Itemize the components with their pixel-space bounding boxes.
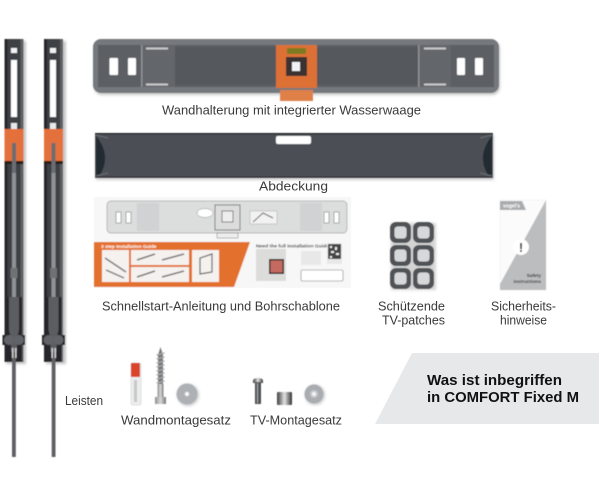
cover bbox=[95, 133, 494, 180]
wall mounting kit bbox=[131, 347, 199, 406]
safety instructions booklet: Safety bbox=[527, 273, 541, 279]
label: Leisten: Leisten bbox=[65, 394, 103, 408]
wall bracket bbox=[93, 39, 500, 101]
caption: protective patches: TV-patches bbox=[382, 312, 445, 328]
orange installation guide bbox=[94, 242, 250, 287]
screw bbox=[155, 347, 166, 404]
safety instructions booklet: instructions bbox=[514, 279, 541, 285]
caption: safety notes: Sicherheits- bbox=[491, 298, 556, 314]
safety instructions booklet: vogel's bbox=[503, 204, 520, 210]
title banner: Was ist inbegriffen bbox=[427, 373, 562, 389]
protective TV patches bbox=[390, 222, 436, 290]
full installation guide info bbox=[256, 243, 343, 281]
safety instructions booklet bbox=[500, 200, 546, 290]
caption: cover: Abdeckung bbox=[259, 178, 328, 194]
spacer bbox=[277, 392, 292, 405]
rail left bbox=[2, 39, 26, 457]
full installation guide info: Need the full Installation Guide? bbox=[256, 244, 332, 250]
caption: TV mounting kit: TV-Montagesatz bbox=[250, 412, 342, 428]
caption: safety notes: hinweise bbox=[500, 312, 547, 328]
bolt bbox=[253, 378, 263, 404]
caption: protective patches bbox=[378, 298, 445, 328]
caption: safety notes bbox=[491, 298, 556, 328]
caption: protective patches: Schützende bbox=[378, 298, 445, 314]
title banner: in COMFORT Fixed M bbox=[427, 390, 579, 406]
rail right bbox=[42, 39, 66, 457]
orange level block bbox=[276, 45, 317, 101]
template bracket outline bbox=[107, 201, 347, 238]
washer bbox=[304, 384, 325, 405]
washer bbox=[176, 384, 199, 406]
title banner bbox=[375, 353, 599, 424]
quick start guide and drilling template bbox=[94, 197, 351, 288]
caption: wall mounting kit: Wandmontagesatz bbox=[121, 412, 231, 428]
QR code bbox=[327, 243, 342, 264]
orange installation guide: 3 step Installation Guide bbox=[101, 244, 157, 250]
wall plug bbox=[131, 363, 141, 405]
TV mounting kit bbox=[253, 378, 325, 405]
caption: wall bracket: Wandhalterung mit integrierter Wasserwaage bbox=[162, 102, 421, 118]
safety instructions booklet: ! bbox=[519, 240, 523, 255]
caption: quick start guide: Schnellstart-Anleitung und Bohrschablone bbox=[102, 298, 340, 314]
